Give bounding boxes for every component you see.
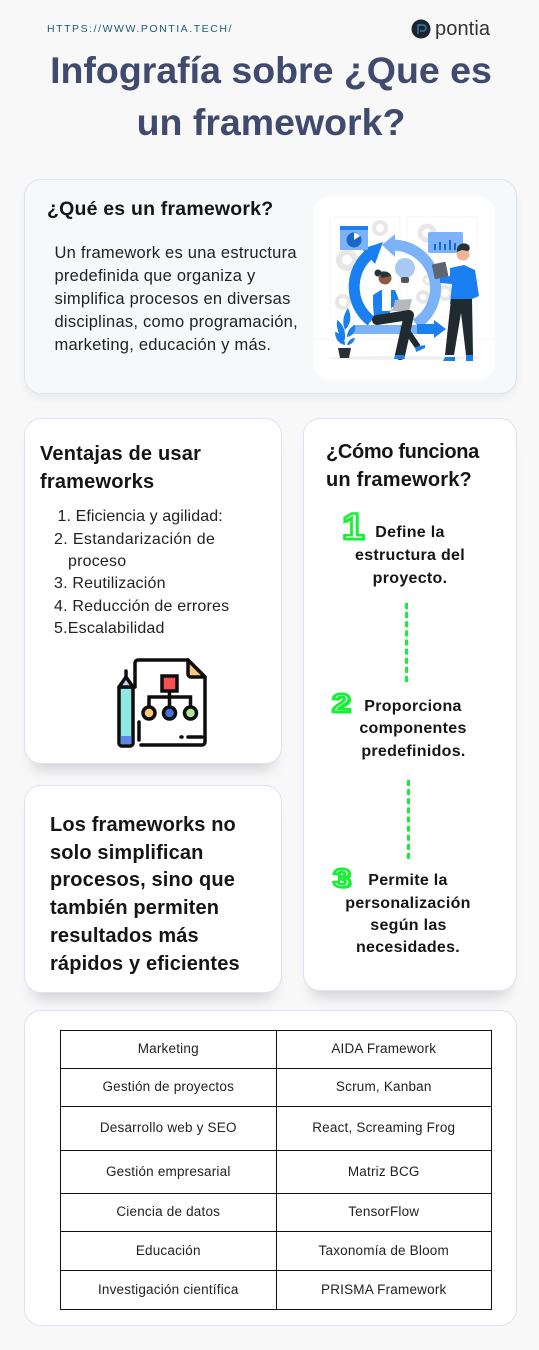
bulb	[394, 258, 414, 278]
callout text	[50, 814, 240, 975]
panel: como funciona	[303, 418, 517, 991]
body text: definition: disciplinas, como programación,	[54, 312, 298, 330]
step text 3: según las	[370, 917, 447, 934]
connector 2	[407, 780, 410, 859]
body text: definition: Un framework es una estructura	[54, 244, 297, 262]
step text 3	[345, 872, 471, 956]
heading: como funciona: un framework?	[326, 469, 472, 491]
body text: definition: marketing, educación y más.	[54, 336, 271, 354]
man	[440, 264, 478, 304]
callout text: Los frameworks no	[50, 814, 236, 836]
list: ventajas: proceso	[68, 553, 126, 570]
table: frameworks by field: Educación	[136, 1242, 201, 1258]
panel: que es un framework	[24, 179, 517, 394]
table: frameworks by field: Gestión de proyectos	[102, 1079, 234, 1094]
body text: definition: predefinida que organiza y	[54, 266, 255, 284]
step text 2: componentes	[359, 720, 467, 737]
title: un framework?	[137, 101, 405, 143]
table: frameworks by field: Ciencia de datos	[116, 1204, 220, 1219]
title: Infografía sobre ¿Que es	[50, 49, 492, 91]
step text 3: Permite la	[368, 872, 448, 889]
table: frameworks by field: PRISMA Framework	[321, 1282, 446, 1296]
step text 1: proyecto.	[373, 570, 447, 587]
body text: definition: simplifica procesos en diversas	[54, 290, 291, 308]
step text 2	[359, 698, 467, 760]
step text 3: necesidades.	[356, 939, 460, 956]
heading: como funciona	[326, 441, 480, 491]
callout text: también permiten	[50, 897, 219, 919]
step text 1	[355, 524, 465, 587]
table: frameworks by field: Desarrollo web y SEO	[100, 1120, 237, 1135]
number 3: 3	[332, 863, 351, 893]
table: frameworks by field: React, Screaming Frog	[312, 1120, 455, 1135]
callout text: procesos, sino que	[50, 869, 235, 891]
number 2: 2	[332, 688, 351, 718]
list: ventajas: 2. Estandarización de	[54, 531, 215, 548]
step text 2: predefinidos.	[361, 743, 466, 760]
heading: como funciona: ¿Cómo funciona	[326, 441, 479, 463]
step 2	[332, 688, 467, 760]
table: frameworks by field: Investigación científica	[98, 1282, 239, 1296]
list: ventajas	[54, 508, 229, 637]
icon: document with hierarchy and pencil	[117, 658, 207, 748]
table: frameworks by field: Gestión empresarial	[106, 1164, 231, 1178]
panel: callout	[24, 785, 282, 993]
plant	[334, 308, 355, 344]
list: ventajas: 1. Eficiencia y agilidad:	[58, 508, 223, 525]
heading: ventajas: frameworks	[40, 471, 154, 493]
arrows	[392, 244, 435, 324]
cards	[340, 226, 368, 250]
body text: definition	[54, 244, 298, 354]
panel: ventajas	[24, 418, 282, 764]
callout text: resultados más	[50, 925, 199, 947]
table: frameworks by field: Matriz BCG	[348, 1164, 420, 1178]
table: frameworks by field: AIDA Framework	[331, 1041, 436, 1056]
callout text: solo simplifican	[50, 842, 204, 864]
step 1	[342, 506, 465, 587]
table: frameworks by field	[60, 1030, 492, 1310]
step text 1: Define la	[375, 524, 445, 541]
heading: que es: ¿Qué es un framework?	[47, 198, 273, 220]
callout text: rápidos y eficientes	[50, 953, 240, 975]
heading: ventajas	[40, 443, 201, 493]
panel: table of frameworks	[24, 1010, 517, 1326]
heading: ventajas: Ventajas de usar	[40, 443, 201, 465]
list: ventajas: 3. Reutilización	[54, 575, 166, 592]
title	[50, 49, 492, 143]
table: frameworks by field: Taxonomía de Bloom	[319, 1242, 449, 1258]
table: frameworks by field: Scrum, Kanban	[336, 1079, 432, 1094]
url header: HTTPS://WWW.PONTIA.TECH/	[47, 23, 233, 35]
connector 1	[405, 603, 408, 682]
list: ventajas: 4. Reducción de errores	[54, 598, 229, 615]
logo: pontia: pontia	[435, 18, 490, 40]
step 3	[332, 863, 471, 956]
table: frameworks by field: Marketing	[138, 1041, 199, 1056]
illustration: team around cycle	[312, 196, 494, 378]
step text 1: estructura del	[355, 547, 465, 564]
woman	[374, 269, 381, 276]
number 1: 1	[342, 506, 365, 547]
step text 2: Proporciona	[364, 698, 462, 715]
step text 3: personalización	[345, 895, 471, 912]
list: ventajas: 5.Escalabilidad	[54, 620, 165, 637]
table: frameworks by field: TensorFlow	[348, 1204, 419, 1219]
